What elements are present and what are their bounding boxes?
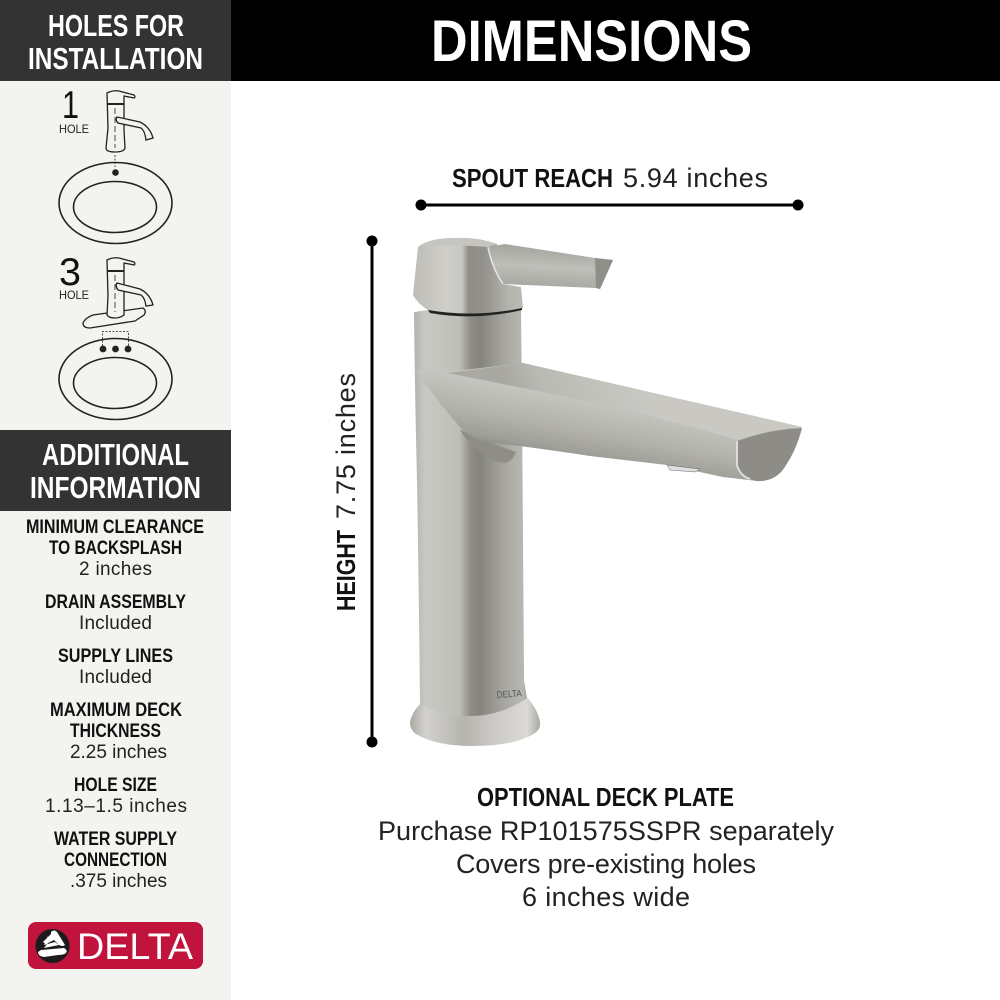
heading: holes for installation: HOLES FOR [48,8,184,43]
spec: drain assembly: Included [79,613,152,634]
title banner: DIMENSIONS [431,9,752,74]
icon: 1 hole installation: 1 [62,84,79,127]
spec: supply lines: SUPPLY LINES [58,646,173,667]
faucet base [410,697,540,746]
faucet body [414,310,527,716]
spec: maximum deck thickness: MAXIMUM DECK [50,700,182,721]
spout reach dimension: 5.94 inches [623,163,768,193]
spec: water supply connection: CONNECTION [64,850,167,871]
spout reach dimension [416,163,804,210]
spec: minimum clearance: MINIMUM CLEARANCE [26,517,204,538]
height dimension: HEIGHT [331,530,361,611]
spec: minimum clearance [26,517,204,580]
spout [416,363,802,481]
spec: drain assembly: DRAIN ASSEMBLY [45,592,186,613]
heading: additional information: INFORMATION [30,470,201,505]
height dimension [331,236,378,748]
icon: 3 hole installation [59,251,172,420]
lever [488,244,613,289]
spec: maximum deck thickness: 2.25 inches [70,742,167,763]
height dimension: 7.75 inches [331,373,361,519]
icon: 3 hole installation: HOLE [59,288,89,302]
logo: Delta [28,922,203,969]
heading: holes for installation [0,0,231,81]
dark ring [428,308,522,316]
spec: hole size [45,775,187,817]
icon: 1 hole installation: HOLE [59,122,89,136]
text block: optional deck plate: 6 inches wide [522,882,690,912]
spec: drain assembly [45,592,186,634]
spout underside [460,430,516,463]
spec: water supply connection [54,829,177,892]
text block: optional deck plate: Purchase RP101575SSPR separately [378,816,834,846]
spout end [737,428,802,481]
spec: minimum clearance: 2 inches [79,559,152,580]
spec: maximum deck thickness: THICKNESS [70,721,161,742]
spec: water supply connection: .375 inches [70,871,167,892]
spec: maximum deck thickness [50,700,182,763]
text block: optional deck plate: Covers pre-existing holes [456,849,756,879]
spout top face [447,363,802,440]
spout reach dimension: SPOUT REACH [452,163,613,193]
heading: additional information: ADDITIONAL [42,437,189,472]
aerator [667,465,700,472]
brand mark: DELTA [496,688,523,701]
spec: water supply connection: WATER SUPPLY [54,829,177,850]
title banner [231,0,1000,81]
icon: 3 hole installation: 3 [59,251,81,294]
spec: hole size: 1.13–1.5 inches [45,796,187,817]
spec: hole size: HOLE SIZE [74,775,157,796]
spec: supply lines: Included [79,667,152,688]
heading: holes for installation: INSTALLATION [28,41,203,76]
sidebar panel [0,0,231,1000]
faucet [410,238,802,746]
icon: 1 hole installation [59,84,172,244]
spec: supply lines [58,646,173,688]
spec: minimum clearance: TO BACKSPLASH [49,538,182,559]
text block: optional deck plate [378,782,834,912]
handle cap [413,238,523,314]
logo: Delta: DELTA [77,925,193,967]
text block: optional deck plate: OPTIONAL DECK PLATE [477,782,734,812]
heading: additional information [0,430,231,511]
